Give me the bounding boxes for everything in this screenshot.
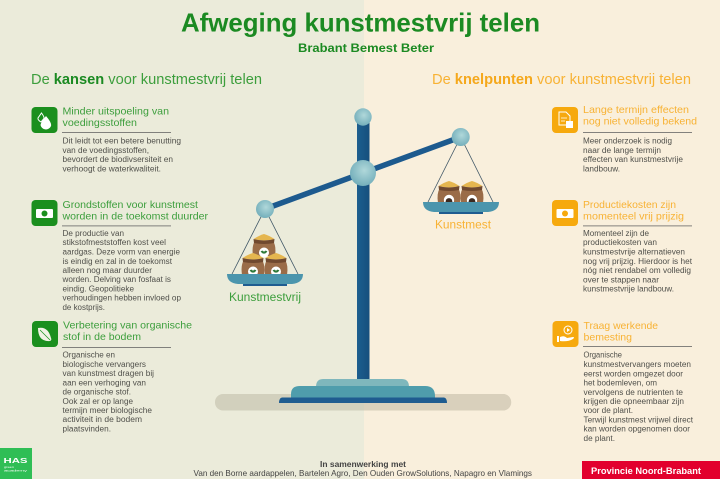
- item text: activiteit in de bodem: [62, 415, 142, 424]
- item heading: voedingsstoffen: [62, 118, 137, 129]
- panel: knelpunt 1: [552, 105, 697, 173]
- item text: naar de lange termijn: [583, 146, 661, 155]
- left pan: [227, 274, 303, 284]
- panel: kans 1: [32, 106, 181, 173]
- icon: hand with clock: [552, 321, 578, 347]
- bags: kunstmest: [438, 181, 483, 205]
- item heading: Grondstoffen voor kunstmest: [62, 200, 198, 211]
- item text: de kostprijs.: [62, 303, 105, 312]
- logo: HAS green academy: HAS: [4, 456, 28, 465]
- icon: banknote: [32, 200, 58, 226]
- item text: verhoogt de waterkwaliteit.: [62, 164, 161, 173]
- logo: Provincie Noord-Brabant: Provincie Noord-Brabant: [591, 466, 702, 477]
- background: right half: [364, 0, 720, 479]
- footer: partners: Van den Borne aardappelen, Bartelen Agro, Den Ouden GrowSolutions, Napagro en Vlamings: [194, 468, 532, 478]
- item text: nog vrij prijzig. Hierdoor is het: [583, 257, 693, 266]
- pivot balls: [256, 108, 470, 218]
- bags: kunstmestvrij: [242, 234, 287, 276]
- item text: van de voedingsstoffen,: [62, 146, 149, 155]
- item text: aan een verhoging van: [62, 379, 146, 388]
- item text: over te stappen naar: [583, 275, 659, 284]
- item heading: [583, 105, 697, 127]
- base: [279, 379, 447, 403]
- item heading: [584, 321, 658, 343]
- balance scale: [215, 108, 511, 411]
- logo: HAS green academy: green: [4, 465, 14, 469]
- item text: de organische stof.: [62, 388, 131, 397]
- label: kunstmest: Kunstmest: [435, 220, 492, 232]
- icon: water drops: [32, 107, 58, 133]
- item text: stikstofmeststoffen kost veel: [62, 238, 166, 247]
- item text: worden. Delving van fosfaat is: [61, 275, 171, 284]
- footer: partners: [194, 459, 532, 478]
- item heading: Traag werkende: [584, 321, 658, 332]
- item text: kunstmestvervangers moeten: [584, 360, 691, 369]
- item text: [62, 351, 154, 434]
- item heading: bemesting: [584, 332, 632, 343]
- item text: eindig. Geopolitieke: [62, 284, 134, 294]
- item heading: momenteel vrij prijzig: [583, 212, 684, 222]
- item text: bevordert de biodivsersiteit en: [62, 155, 173, 164]
- ground bar: [215, 394, 511, 410]
- item text: eerst worden omgezet door: [584, 369, 683, 378]
- label: kunstmestvrij: Kunstmestvrij: [229, 292, 301, 304]
- item heading: stof in de bodem: [63, 332, 141, 343]
- logo: Provincie Noord-Brabant: [582, 461, 720, 479]
- item heading: Minder uitspoeling van: [62, 106, 169, 118]
- item text: biologische vervangers: [62, 360, 146, 369]
- item text: is eindig en zal in de toekomst: [62, 257, 173, 266]
- item text: verhoudingen hebben invloed op: [62, 294, 182, 303]
- right pan: [423, 202, 499, 212]
- item text: alleen nog maar duurder: [62, 266, 152, 275]
- item heading: worden in de toekomst duurder: [61, 212, 209, 222]
- panel: kans 2: [32, 200, 209, 312]
- panel: knelpunt 2: [552, 200, 693, 294]
- beam: [265, 137, 461, 209]
- item text: [583, 136, 683, 173]
- item text: de plant.: [584, 434, 615, 443]
- heading: kansen: De kansen voor kunstmestvrij telen: [31, 72, 262, 88]
- panel: kans 3: [32, 320, 192, 434]
- item text: [61, 229, 182, 312]
- panel: knelpunt 3: [552, 321, 694, 443]
- title: Afweging kunstmestvrij telen: [181, 8, 540, 38]
- logo: HAS green academy: [0, 448, 32, 479]
- icon: banknote: [552, 200, 578, 226]
- item text: Dit leidt tot een betere benutting: [62, 136, 181, 146]
- item text: Ook zal er op lange: [62, 397, 133, 406]
- footer: partners: In samenwerking met: [320, 459, 406, 469]
- item text: landbouw.: [583, 164, 620, 173]
- item text: De productie van: [62, 229, 124, 238]
- item text: kan worden opgenomen door: [584, 425, 690, 434]
- item text: Momenteel zijn de: [583, 229, 649, 238]
- item text: het bodemleven, om: [584, 379, 657, 388]
- logo: HAS green academy: academy: [4, 468, 28, 472]
- item heading: Verbetering van organische: [63, 320, 192, 332]
- item text: voor de plant.: [584, 406, 633, 415]
- item text: kunstmestvrije landbouw.: [583, 285, 674, 294]
- item text: Organische: [584, 351, 622, 360]
- item text: [584, 351, 694, 443]
- item heading: [61, 200, 209, 222]
- strings: [232, 137, 493, 274]
- item text: [62, 136, 181, 173]
- item text: termijn meer biologische: [62, 406, 152, 415]
- item text: krijgen die opneembaar zijn: [584, 397, 684, 406]
- item text: Terwijl kunstmest vrijwel direct: [584, 415, 694, 424]
- item text: productiekosten van: [583, 238, 657, 247]
- heading: knelpunten: De knelpunten voor kunstmestvrij telen: [432, 72, 691, 88]
- item heading: [583, 200, 684, 222]
- item text: Meer onderzoek is nodig: [583, 136, 672, 146]
- item heading: [63, 320, 192, 343]
- item text: plaatsvinden.: [62, 425, 111, 434]
- item text: effecten van kunstmestvrije: [583, 155, 683, 164]
- item heading: [62, 106, 169, 129]
- item heading: nog niet volledig bekend: [583, 116, 697, 127]
- item text: aardgas. Deze vorm van energie: [62, 248, 180, 257]
- item text: van kunstmest dragen bij: [62, 369, 154, 378]
- icon: leaf: [32, 321, 58, 347]
- item text: [583, 229, 693, 294]
- item heading: Productiekosten zijn: [583, 200, 676, 211]
- background: left half: [0, 0, 364, 479]
- subtitle: Brabant Bemest Beter: [298, 41, 434, 55]
- post: [357, 115, 370, 382]
- item text: vervolgens de nutrienten te: [584, 388, 683, 397]
- item text: nóg niet rendabel om volledig: [583, 266, 691, 275]
- item text: kunstmestvrije alternatieven: [583, 248, 685, 257]
- icon: document: [552, 107, 578, 133]
- item text: Organische en: [62, 351, 115, 360]
- item heading: Lange termijn effecten: [583, 105, 689, 116]
